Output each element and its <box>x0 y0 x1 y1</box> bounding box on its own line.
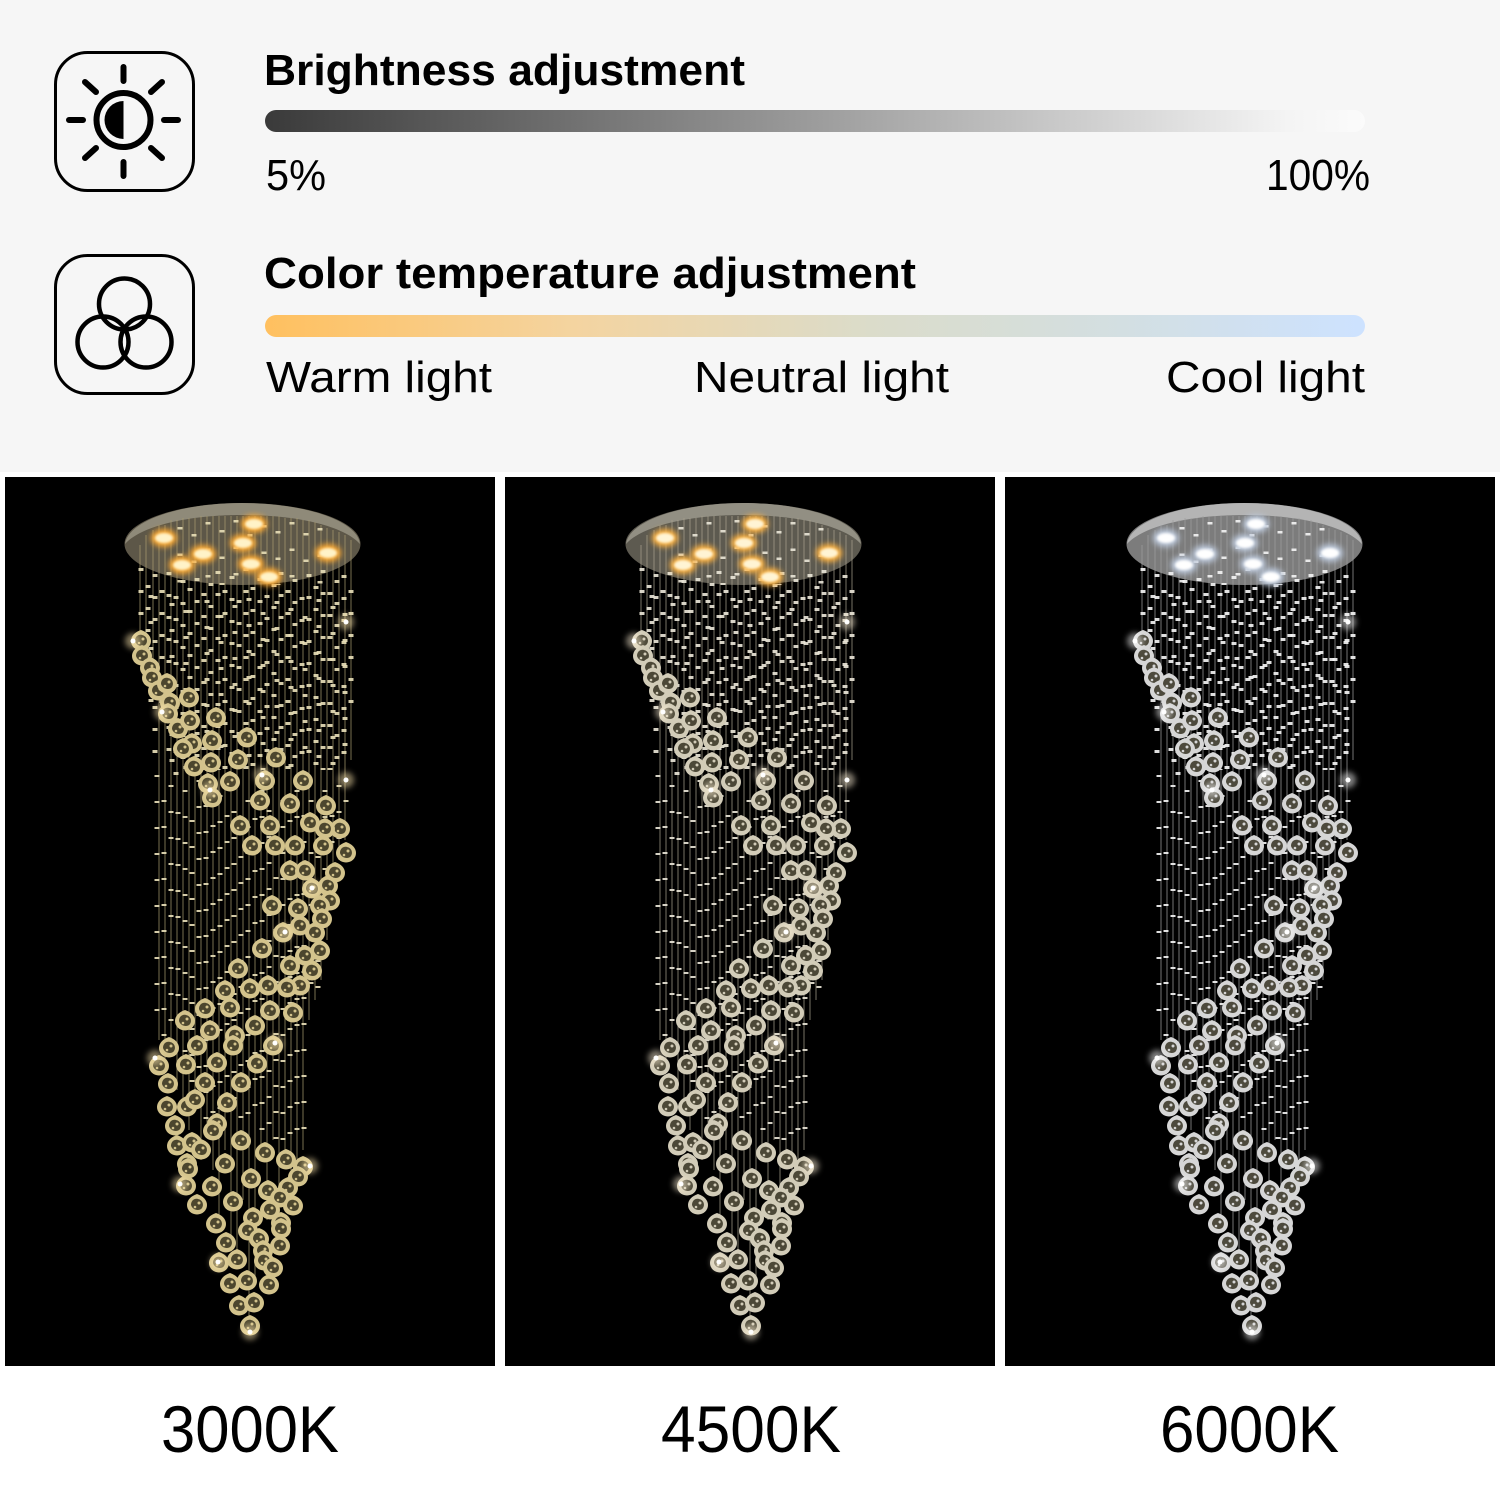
panel: 3000K chandelier photo <box>5 477 495 1366</box>
label: cool light: Cool light <box>1166 353 1365 402</box>
heading: brightness: Brightness adjustment <box>264 46 745 95</box>
label: 5%: 5% <box>266 151 326 200</box>
brightness gradient bar <box>265 110 1365 132</box>
heading: color temperature: Color temperature adjustment <box>264 249 916 298</box>
label: 100%: 100% <box>1266 151 1370 200</box>
color temperature gradient bar <box>265 315 1365 337</box>
top background panel <box>0 0 1500 472</box>
caption: 6000K: 6000K <box>1160 1392 1339 1466</box>
icon: three overlapping circles <box>56 256 194 394</box>
label: neutral light: Neutral light <box>694 353 949 402</box>
panel: 6000K chandelier photo <box>1005 477 1495 1366</box>
icon: sun brightness <box>56 52 194 190</box>
panel: 4500K chandelier photo <box>505 477 995 1366</box>
caption: 3000K: 3000K <box>161 1392 339 1466</box>
caption: 4500K: 4500K <box>661 1392 841 1466</box>
label: warm light: Warm light <box>266 353 492 402</box>
